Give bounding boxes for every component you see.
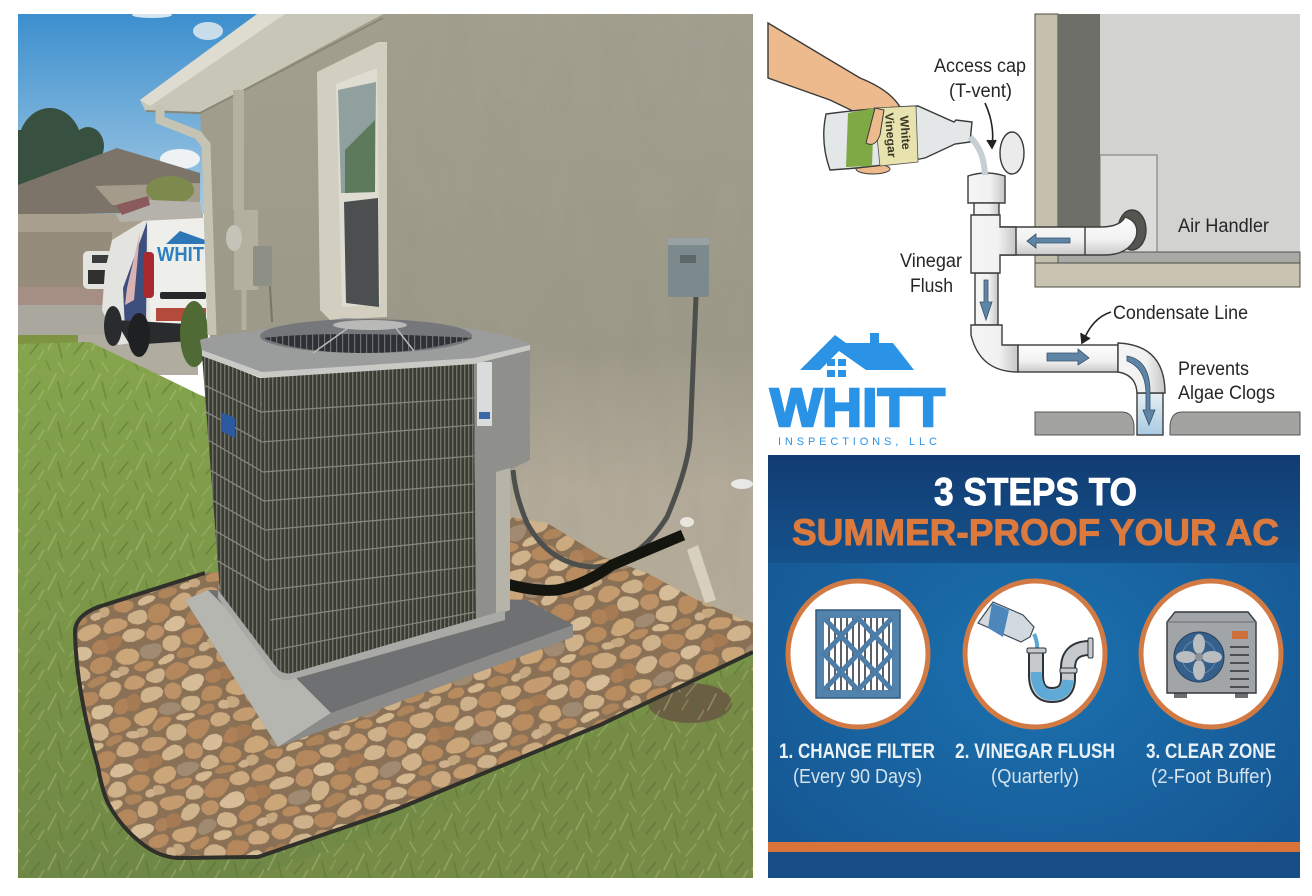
air handler port (1118, 210, 1146, 250)
heading line one: 3 STEPS TO (934, 471, 1137, 514)
side face grille (202, 355, 280, 677)
utility column and meters (226, 90, 272, 330)
electrical disconnect box (668, 238, 709, 297)
horizontal condensate pipe (1018, 345, 1118, 372)
drain outlet (1137, 393, 1163, 435)
house stucco wall (200, 14, 753, 623)
vinegar bottle (824, 106, 972, 170)
white parked car (83, 251, 110, 289)
bottle label text (882, 112, 913, 158)
base pan (218, 590, 505, 680)
trees behind neighbouring house (18, 108, 104, 185)
pipe neck (974, 203, 999, 215)
heading line two: SUMMER-PROOF YOUR AC (792, 512, 1279, 553)
front coil grille (260, 363, 476, 677)
icon: outdoor AC unit (1167, 612, 1256, 698)
AC condenser unit (200, 318, 530, 680)
river rock bed (77, 517, 753, 856)
neighbouring house (18, 148, 203, 288)
grille guard wires (204, 385, 475, 650)
logo tagline: INSPECTIONS, LLC (778, 436, 937, 448)
panel background (768, 455, 1300, 878)
icon: bottle pouring into P-trap (978, 602, 1093, 695)
diagram labels (900, 56, 1275, 404)
drain basin (1035, 412, 1300, 435)
brand badge (221, 412, 235, 438)
vinegar stream (970, 137, 985, 175)
wall fitting (731, 479, 753, 489)
flow arrows (980, 234, 1155, 425)
lower elbow (971, 325, 1018, 372)
driveway (18, 287, 198, 375)
step 1: change filter (779, 581, 935, 788)
bottle fingers beneath (856, 164, 890, 174)
bottle label text: Vinegar (882, 112, 899, 158)
fan guard (260, 319, 473, 353)
panel: condensate line vinegar flush diagram (768, 14, 1300, 435)
shrub (180, 301, 208, 367)
data label (477, 362, 492, 426)
circle badge (1141, 581, 1281, 727)
step title: 1. CHANGE FILTER (779, 740, 935, 763)
service van with company logo (102, 196, 208, 357)
arrow to access cap (985, 103, 996, 148)
label: algae clogs: Algae Clogs (1178, 383, 1275, 404)
downspout (160, 105, 212, 335)
logo: Whitt Inspections (770, 333, 945, 448)
removed access cap (1000, 132, 1024, 174)
pipe assembly (968, 173, 1165, 435)
concrete pad (185, 590, 573, 747)
icon: air filter (816, 610, 900, 698)
panel: photo of AC condenser beside house (18, 12, 760, 878)
van logo house (166, 231, 205, 244)
label: condensate line: Condensate Line (1113, 303, 1248, 324)
label: flush: Flush (910, 276, 953, 297)
label: T-vent: (T-vent) (949, 81, 1012, 102)
window (317, 42, 387, 320)
lid (200, 318, 530, 377)
logo wordmark: WHITT (770, 378, 945, 438)
van logo text: WHIT (157, 244, 204, 266)
step 2: vinegar flush (955, 581, 1115, 788)
step title: 3. CLEAR ZONE (1146, 740, 1276, 763)
PVC drain stand (687, 545, 716, 603)
step detail: (Quarterly) (991, 766, 1079, 788)
white cap fitting (680, 517, 694, 527)
roof eave and soffit (140, 14, 383, 113)
logo house roof (800, 333, 914, 370)
step detail: (2-Foot Buffer) (1151, 766, 1272, 788)
label: access cap: Access cap (934, 56, 1026, 77)
bottle label text: White (897, 115, 913, 150)
step detail: (Every 90 Days) (793, 766, 922, 788)
lawn (18, 342, 753, 878)
arrow to condensate line (1081, 312, 1111, 343)
logo window (827, 359, 846, 377)
sky with clouds (18, 12, 258, 214)
hand holding bottle (768, 23, 985, 175)
down pipe (975, 273, 998, 325)
black landscape edging (75, 573, 753, 858)
electrical conduit (513, 297, 696, 567)
label: prevents: Prevents (1178, 359, 1249, 380)
label: vinegar: Vinegar (900, 251, 963, 272)
insulated refrigerant line (503, 535, 683, 590)
circle badge (788, 581, 928, 727)
step title: 2. VINEGAR FLUSH (955, 740, 1115, 763)
label: air handler: Air Handler (1178, 216, 1270, 237)
horizontal pipe with elbow to port (1000, 217, 1137, 255)
step 3: clear zone (1141, 581, 1281, 788)
tee fitting (971, 215, 1016, 273)
forearm and hand (768, 23, 900, 145)
panel: 3 steps to summer-proof your AC (768, 455, 1300, 878)
access collar (968, 173, 1005, 203)
right elbow (1118, 343, 1165, 393)
circle badge (965, 581, 1105, 727)
service corner panel (474, 346, 530, 626)
air handler cabinet (1035, 14, 1300, 287)
